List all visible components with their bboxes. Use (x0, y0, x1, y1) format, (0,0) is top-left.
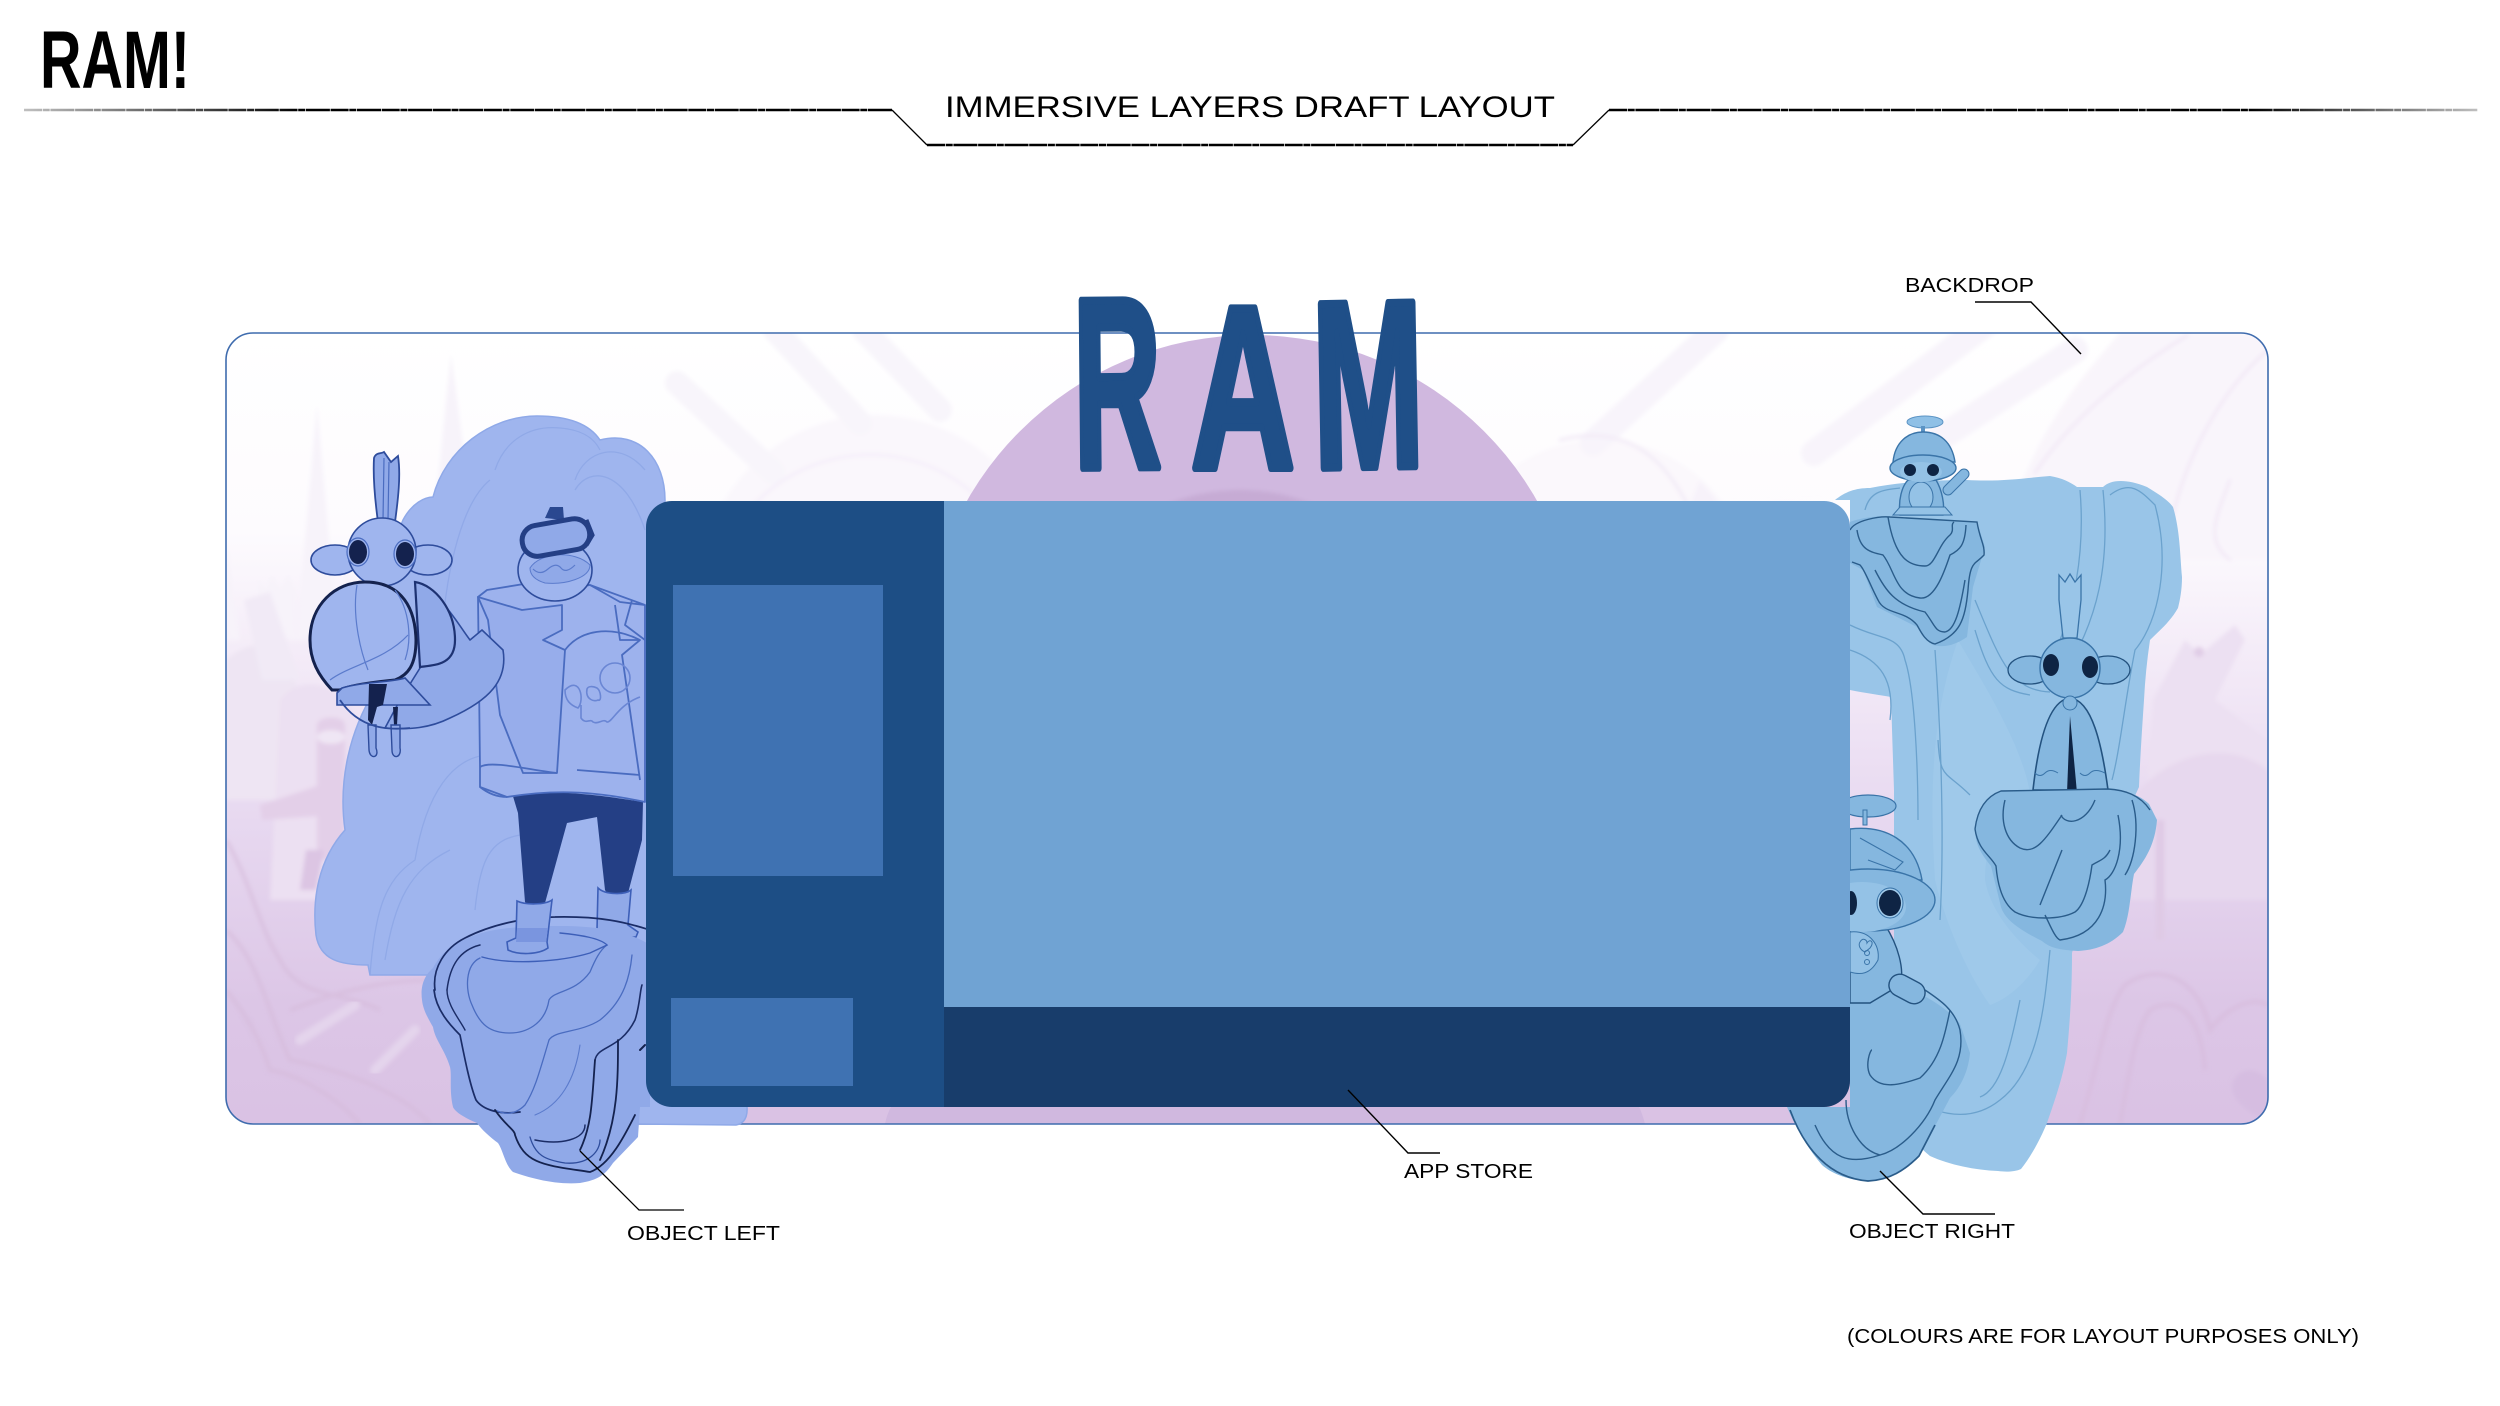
bird eyes (347, 538, 369, 566)
logo: RAM!: RAM! (40, 15, 190, 106)
bird back wing (415, 582, 455, 667)
header rule with title notch (24, 110, 2478, 145)
pillar cloud lighter center (1932, 640, 2040, 1005)
bird crest (374, 452, 399, 522)
bird ears (311, 545, 359, 575)
title: immersive layers draft layout: IMMERSIVE LAYERS DRAFT LAYOUT (945, 91, 1555, 124)
leggings (512, 792, 643, 907)
top rock lines (1850, 517, 1984, 644)
lower robot rock (1787, 975, 1970, 1181)
backdrop: right-side silhouettes and hearts (2156, 627, 2244, 876)
jacket skull print (565, 663, 640, 723)
panel: backdrop layer (226, 320, 2268, 1124)
VR headset (520, 507, 592, 559)
right pillar cloud (1835, 476, 2182, 1172)
right bird (2008, 574, 2130, 793)
character arm holding bird (385, 590, 504, 729)
rock contour lines left (434, 917, 650, 1172)
label: backdrop (1905, 275, 2081, 354)
label: object left: OBJECT LEFT (627, 1223, 780, 1245)
label: object right: OBJECT RIGHT (1849, 1221, 2015, 1243)
main title: RAM (1072, 247, 1426, 520)
object right: pillar cloud, robots, birds and rocks (1787, 416, 2182, 1181)
bird head (348, 518, 416, 586)
main title: RAM: R (1072, 247, 1162, 520)
backdrop: faint capsules and domes, top (668, 334, 2266, 558)
left cloud inner lines (370, 428, 645, 975)
backdrop: bottom hill strip (886, 1107, 1644, 1123)
app store: bottom bar (944, 1007, 1850, 1107)
backdrop: mid-ground silhouettes left (228, 596, 346, 900)
main title: RAM: A (1191, 258, 1295, 517)
backdrop: central purple dome (967, 335, 1537, 501)
main title: RAM: M (1310, 250, 1426, 519)
object left: cloud, character, bird, floating rock (310, 416, 747, 1183)
backdrop: faint castle (310, 372, 461, 530)
app store: sidebar (646, 501, 944, 1107)
jacket lapel and details (478, 585, 645, 797)
jacket body (478, 583, 645, 802)
backdrop: contour strokes left (227, 841, 265, 930)
top robot rock (1850, 516, 1985, 646)
note: colours for layout only: (COLOURS ARE FOR LAYOUT PURPOSES ONLY) (1847, 1326, 2359, 1348)
character head (518, 539, 592, 601)
boot front (507, 900, 552, 954)
label: object left (580, 1151, 780, 1245)
label: backdrop: BACKDROP (1905, 275, 2034, 297)
panel: app store (646, 501, 1850, 1107)
lower rock lines (1790, 990, 1961, 1181)
bird robe and straps (337, 678, 430, 705)
label: object right (1849, 1171, 2015, 1243)
bird wing dome (310, 582, 416, 690)
left cloud backing (315, 416, 747, 1125)
right middle rock lines (1975, 789, 2150, 940)
backdrop frame outline (226, 333, 2268, 1124)
label: app store: APP STORE (1404, 1161, 1533, 1183)
right middle rock (1975, 789, 2157, 951)
label: app store (1348, 1090, 1533, 1183)
lower robot (1801, 795, 1935, 1008)
boots (597, 888, 638, 937)
top robot (1890, 416, 1964, 515)
floating rock left (422, 926, 650, 1183)
pillar lines (1850, 488, 2162, 1114)
app store: sidebar top block (673, 585, 883, 876)
app store: sidebar bottom block (671, 998, 853, 1086)
